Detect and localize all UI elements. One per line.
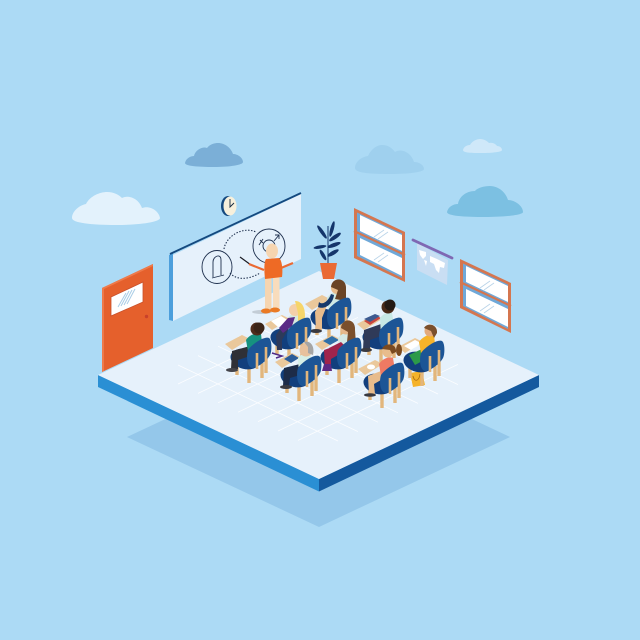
window: right <box>460 259 511 333</box>
platform <box>98 271 539 492</box>
student: long brown hair, crimson <box>315 320 361 383</box>
bag <box>410 371 425 387</box>
diagram: dotted connectors <box>224 230 260 278</box>
cloud: dark blue <box>185 143 243 167</box>
student: grey hair <box>275 342 321 401</box>
student: yellow shirt <box>398 325 444 386</box>
cloud: small pale <box>463 139 502 153</box>
diagram: condom icon <box>202 250 232 284</box>
student: teal shirt <box>225 322 282 383</box>
door <box>102 264 153 372</box>
diagram: gender symbols icon <box>253 229 285 263</box>
cloud: mid blue <box>447 186 523 217</box>
student: ponytail, salmon top <box>358 344 404 408</box>
plant <box>313 221 342 279</box>
student: brown long hair, back row <box>305 279 351 343</box>
clock <box>221 196 236 216</box>
whiteboard <box>169 193 301 321</box>
student: black hair <box>357 300 403 363</box>
window: left <box>354 208 405 282</box>
student: blonde <box>265 301 311 363</box>
wall map <box>413 240 452 285</box>
cloud: large white <box>72 192 160 225</box>
teacher <box>240 244 293 314</box>
platform shadow <box>127 347 510 527</box>
cloud: faint <box>355 145 424 174</box>
